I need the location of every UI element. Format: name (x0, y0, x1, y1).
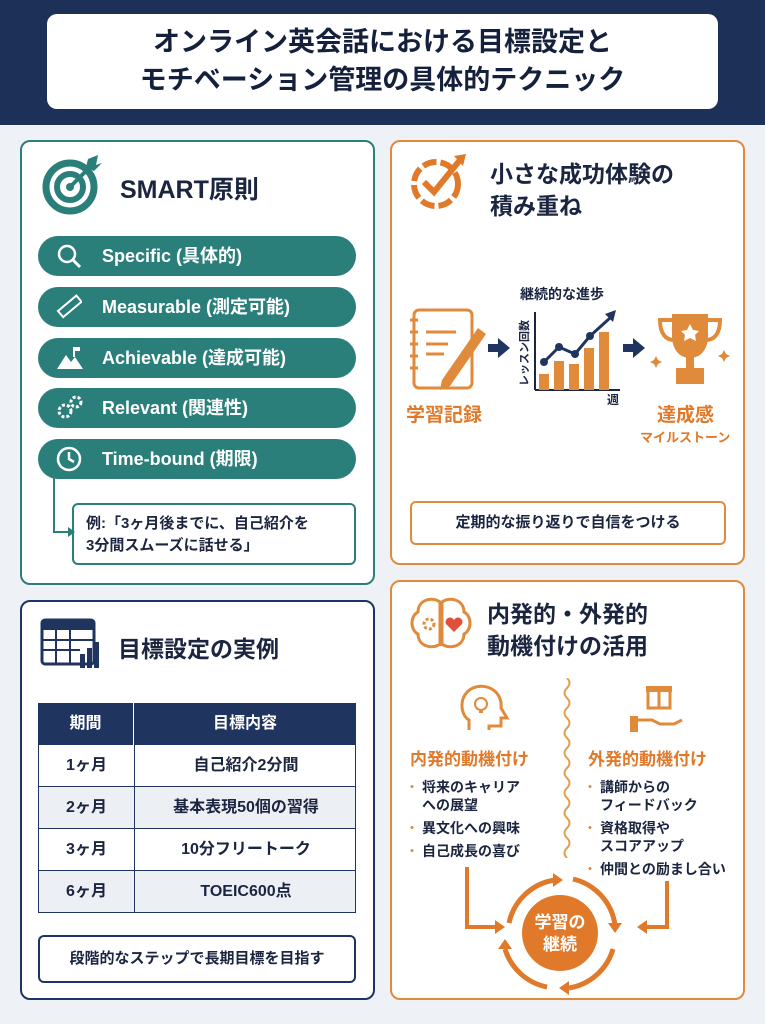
extrinsic column: フィードバック (600, 797, 698, 813)
table: 目標内容 (213, 715, 277, 732)
icon: brain (410, 598, 472, 648)
pill: Time-bound (38, 439, 356, 479)
pill: Relevant: Relevant (関連性) (102, 398, 248, 418)
table: 6ヶ月 (66, 883, 107, 900)
title: モチベーション管理の具体的テクニック (140, 65, 625, 95)
callout: review: 定期的な振り返りで自信をつける (455, 514, 680, 531)
pill: Measurable (38, 287, 356, 327)
heading: motivation: 動機付けの活用 (487, 633, 648, 659)
extrinsic column: スコアアップ (600, 838, 684, 854)
table: 10分フリートーク (181, 841, 311, 858)
pill: Measurable: Measurable (測定可能) (102, 297, 290, 317)
table: 自己紹介2分間 (194, 757, 298, 774)
intrinsic column: 内発的動機付け (410, 750, 529, 769)
diagram: learning cycle: 継続 (543, 935, 577, 954)
intrinsic column: 異文化への興味 (422, 820, 520, 836)
extrinsic column (588, 750, 726, 877)
panel: goal examples (20, 600, 375, 1000)
example box: 3分間スムーズに話せる」 (86, 537, 259, 554)
table: 期間 (69, 715, 102, 732)
heading: goal examples: 目標設定の実例 (118, 636, 279, 662)
icon: notebook (410, 308, 486, 390)
diagram: learning cycle: 学習の (534, 912, 586, 932)
arrow (623, 338, 645, 358)
callout: long-term: 段階的なステップで長期目標を目指す (69, 950, 324, 967)
label: achievement: 達成感 (657, 405, 714, 426)
callout: long-term (38, 935, 356, 983)
arrow (488, 338, 510, 358)
heading: small success (490, 161, 674, 219)
table: TOEIC600点 (200, 883, 292, 900)
table: 2ヶ月 (66, 799, 107, 816)
intrinsic column: への展望 (422, 797, 478, 813)
icon: table chart (40, 618, 99, 668)
title: オンライン英会話における目標設定と (153, 27, 612, 57)
diagram: learning cycle (465, 867, 669, 995)
extrinsic column: 資格取得や (600, 820, 670, 836)
heading: small success: 小さな成功体験の (490, 161, 674, 187)
intrinsic column: 将来のキャリア (422, 779, 520, 795)
panel: motivation (390, 580, 745, 1000)
divider: wavy (564, 678, 570, 858)
panel: SMART (20, 140, 375, 585)
label: continuous progress: 継続的な進歩 (520, 286, 604, 302)
heading: small success: 積み重ね (490, 193, 582, 219)
pill: Time-bound: Time-bound (期限) (102, 449, 258, 469)
icon: target (42, 155, 102, 214)
heading: motivation (487, 601, 648, 659)
pill: Relevant (38, 388, 356, 428)
chart: progress: 週 (607, 392, 619, 407)
text: マイルストーン (640, 430, 730, 445)
intrinsic column: 自己成長の喜び (422, 843, 520, 859)
example box (72, 503, 356, 565)
table (38, 703, 356, 913)
pill: Specific: Specific (具体的) (102, 246, 242, 266)
icon: check circle (411, 154, 466, 209)
intrinsic column (410, 750, 529, 859)
extrinsic column: 講師からの (600, 779, 670, 795)
panel: small success (390, 140, 745, 565)
example box: 例:「3ヶ月後までに、自己紹介を (86, 515, 309, 532)
title (47, 14, 718, 109)
label: study record: 学習記録 (406, 405, 482, 426)
pill: Achievable (38, 338, 356, 378)
pill: Specific (38, 236, 356, 276)
chart: progress (517, 310, 620, 407)
table: 1ヶ月 (66, 757, 107, 774)
table: 基本表現50個の習得 (173, 799, 319, 816)
icon: head bulb (460, 684, 510, 730)
pill: Achievable: Achievable (達成可能) (102, 348, 286, 368)
icon: trophy (650, 314, 730, 384)
extrinsic column: 外発的動機付け (588, 750, 707, 769)
heading: SMART: SMART原則 (120, 176, 259, 204)
heading: motivation: 内発的・外発的 (487, 601, 648, 627)
icon: gift hand (630, 686, 683, 732)
callout: review (410, 501, 726, 545)
arrow: connector (53, 478, 75, 537)
table: 3ヶ月 (66, 841, 107, 858)
extrinsic column: 仲間との励まし合い (600, 861, 726, 877)
header band (0, 0, 765, 125)
chart: progress: レッスン回数 (517, 320, 531, 386)
